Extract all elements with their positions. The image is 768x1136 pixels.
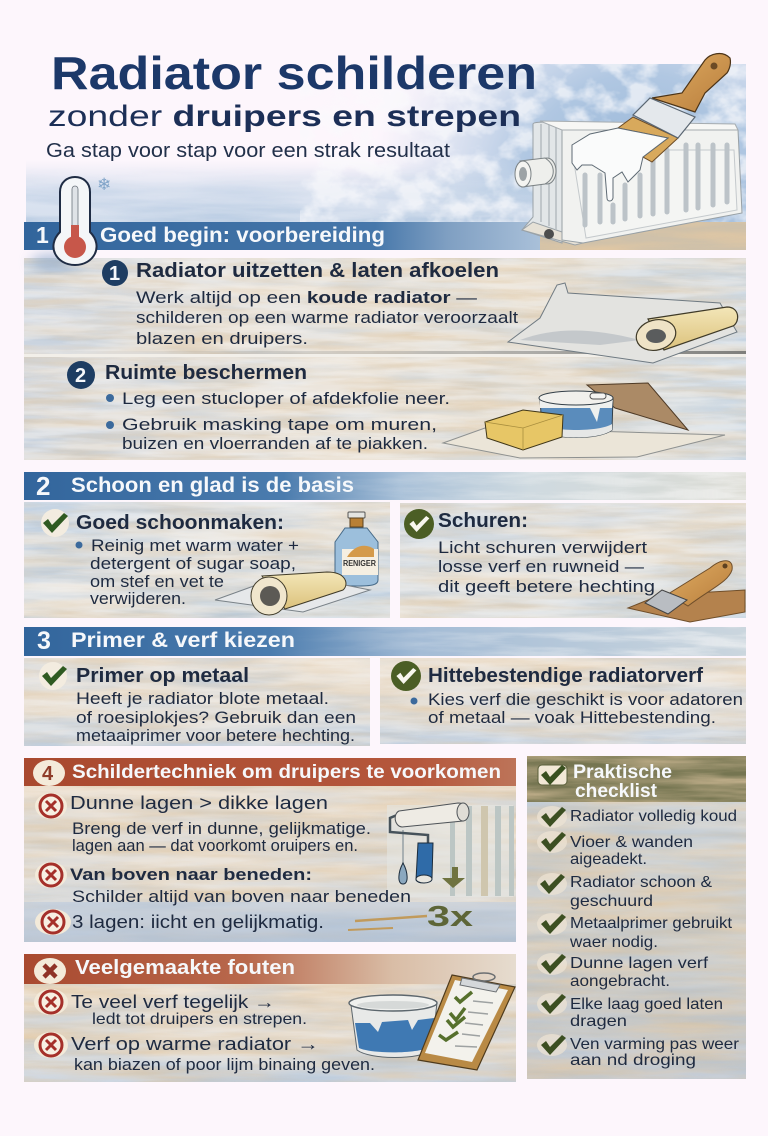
heading: Goed schoonmaken:	[76, 512, 284, 534]
step 1 number	[102, 260, 128, 286]
cleaning text: detergent of sugar soap,	[90, 554, 296, 573]
heading: Schuren:	[438, 510, 528, 532]
checklist header: Praktische	[573, 762, 672, 783]
icon: three times label	[348, 901, 473, 933]
check item 5: Dunne lagen verf	[570, 955, 709, 972]
panel: sanding	[400, 503, 746, 622]
icon: three times label: 3x	[427, 901, 473, 933]
item 3: three layers: 3 lagen: iicht en gelijkmatig.	[72, 912, 324, 932]
panel background	[24, 658, 370, 746]
check item 4: Metaalprimer gebruikt	[570, 915, 733, 932]
section 4 heading bar	[24, 758, 516, 786]
item 3: three layers	[35, 909, 324, 935]
primer text: of roesiplokjes? Gebruik dan een	[76, 708, 356, 727]
item 2: top to bottom: Schilder altijd van boven naar beneden	[72, 887, 411, 906]
check item 4	[537, 913, 733, 951]
step 1 text: blazen en druipers.	[136, 329, 308, 348]
mistake 1: Te veel verf tegelijk →	[71, 992, 275, 1012]
section 4 heading bar: Schildertechniek om druipers te voorkomen	[72, 762, 501, 783]
item 1: thin layers	[35, 793, 371, 855]
section 3 heading bar: 3	[37, 627, 51, 655]
item 2: top to bottom: Van boven naar beneden:	[70, 865, 312, 884]
panel background	[24, 254, 746, 460]
panel background	[24, 786, 516, 942]
mistake 1: ledt tot druipers en strepen.	[92, 1011, 307, 1028]
mistake 2: kan biazen of poor lijm binaing geven.	[74, 1055, 375, 1074]
icon: radiator with paint brush	[515, 54, 742, 245]
icon: radiator background stripes	[387, 805, 514, 897]
step 2 number	[67, 361, 95, 389]
snowflake: ❄	[97, 175, 111, 194]
panel: practical checklist	[527, 756, 746, 1079]
heading: Hittebestendige radiatorverf	[428, 665, 703, 687]
section 3 heading bar	[24, 627, 746, 656]
section 2 heading bar: 2	[36, 471, 50, 501]
panel: good cleaning	[24, 502, 390, 618]
check item 3	[537, 873, 712, 910]
primer text: Heeft je radiator blote metaal.	[76, 689, 329, 708]
check item 1	[537, 806, 737, 828]
check item 7: Ven varming pas weer	[570, 1036, 740, 1053]
step 1 heading: Radiator uitzetten & laten afkoelen	[136, 260, 499, 282]
check item 6: Elke laag goed laten	[570, 996, 723, 1013]
panel: heat resistant paint	[380, 658, 746, 744]
thermometer icon	[53, 175, 111, 265]
title: Radiator schilderen	[51, 47, 537, 99]
primer text: metaaiprimer voor betere hechting.	[76, 726, 355, 745]
paint text: of metaal — voak Hittebestending.	[428, 708, 716, 727]
icon: cleaner bottle and roll: RENIGER	[343, 559, 376, 568]
step 2 bullets: buizen en vloerranden af te piakken.	[122, 434, 428, 453]
check item 2: aigeadekt.	[570, 851, 647, 868]
step 2 bullets	[106, 389, 450, 453]
item 1: thin layers: lagen aan — dat voorkomt oruipers en.	[72, 836, 358, 855]
mistake 2: Verf op warme radiator →	[71, 1034, 319, 1054]
section 2 heading bar: Schoon en glad is de basis	[71, 474, 354, 497]
header: title area with watercolor background	[24, 47, 746, 250]
paint text	[410, 690, 743, 727]
sanding text: dit geeft betere hechting	[438, 577, 655, 596]
panel: common mistakes	[24, 954, 516, 1082]
check item 7: aan nd droging	[570, 1052, 696, 1069]
check item 2	[537, 831, 693, 868]
check item 6	[537, 993, 723, 1030]
subtitle: zonder druipers en strepen	[48, 100, 521, 133]
panel background	[24, 984, 516, 1082]
check item 3: Radiator schoon &	[570, 874, 712, 891]
watercolor wash	[26, 64, 746, 250]
mistakes heading bar: Veelgemaakte fouten	[75, 957, 295, 979]
cleaning text: verwijderen.	[90, 589, 186, 608]
panel: section 4 painting technique	[24, 758, 516, 942]
mistake 2	[34, 1032, 375, 1074]
section 1 heading bar: 1	[36, 222, 49, 248]
check item 7	[537, 1034, 740, 1069]
icon: check badge	[391, 661, 421, 691]
section 3 heading bar: Primer & verf kiezen	[71, 629, 295, 652]
check item 6: dragen	[570, 1013, 627, 1030]
icon: check	[41, 509, 69, 537]
heading: Primer op metaal	[76, 665, 249, 687]
mistake 1	[34, 989, 307, 1028]
icon: check	[39, 662, 67, 690]
panel: section 1 preparation	[24, 254, 746, 460]
check item 3: geschuurd	[570, 893, 653, 910]
step 1 text: schilderen op een warme radiator veroorzaalt	[136, 308, 518, 327]
check item 5	[537, 953, 709, 990]
checklist header: checklist	[575, 781, 658, 802]
check item 4: waer nodig.	[569, 934, 658, 951]
paint text: Kies verf die geschikt is voor adatoren	[428, 690, 743, 709]
icon: foil and roll	[508, 283, 738, 363]
section 4 heading bar: 4	[42, 763, 54, 785]
step 2 number: 2	[75, 365, 86, 387]
icon: cleaner bottle and roll	[215, 512, 378, 615]
sanding text	[438, 538, 655, 596]
tagline: Ga stap voor stap voor een strak resultaat	[46, 140, 450, 162]
item 1: thin layers: Breng de verf in dunne, gelijkmatige.	[72, 819, 371, 838]
checklist background	[527, 802, 746, 1079]
step 2 bullets: Gebruik masking tape om muren,	[122, 415, 437, 434]
icon: sanding block	[628, 561, 745, 622]
item 1: thin layers: Dunne lagen > dikke lagen	[70, 793, 328, 813]
section 1 heading bar: Goed begin: voorbereiding	[100, 224, 385, 247]
panel background	[400, 503, 746, 618]
check item 1: Radiator volledig koud	[570, 808, 737, 825]
panel: primer on metal	[24, 658, 370, 746]
primer text	[76, 689, 356, 745]
icon: sponge, paint can, sanding paper	[443, 383, 725, 458]
step 1 number: 1	[109, 263, 120, 285]
checklist header	[527, 756, 746, 802]
icon: clipboard	[418, 973, 515, 1070]
sanding text: Licht schuren verwijdert	[438, 538, 647, 557]
check item 2: Vioer & wanden	[570, 834, 693, 851]
step 2 bullets: Leg een stucloper of afdekfolie neer.	[122, 389, 450, 408]
icon: check badge	[404, 509, 434, 539]
section 1 heading bar	[24, 222, 540, 250]
sanding text: losse verf en ruwneid —	[438, 557, 644, 576]
step 1 text: Werk altijd op een koude radiator —	[136, 288, 477, 307]
section 2 heading bar	[24, 471, 746, 501]
step 2 heading: Ruimte beschermen	[105, 362, 307, 384]
check item 5: aongebracht.	[570, 973, 670, 990]
cleaning text: Reinig met warm water +	[91, 536, 299, 555]
icon: paint bucket	[349, 995, 437, 1058]
cleaning text	[76, 536, 299, 608]
step 1 text	[136, 288, 518, 348]
item 2: top to bottom	[35, 862, 411, 906]
icon: paint roller with arrow	[390, 803, 469, 888]
panel background	[380, 658, 746, 744]
cleaning text: om stef en vet te	[90, 572, 224, 591]
mistakes heading bar	[24, 954, 516, 984]
panel background	[24, 502, 390, 618]
